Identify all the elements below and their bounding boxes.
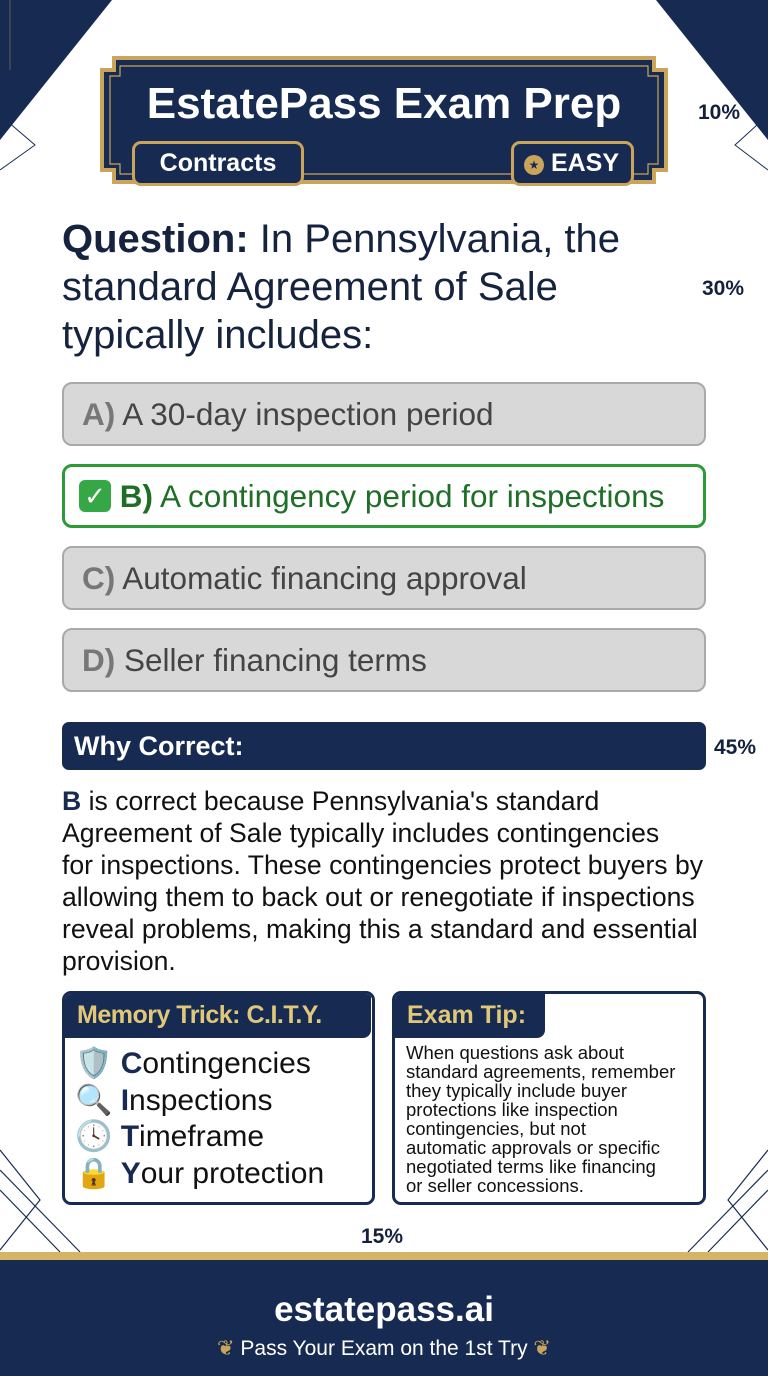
option B correct <box>62 464 706 528</box>
explanation text: provision. <box>62 946 176 976</box>
exam tip text: they typically include buyer <box>406 1080 627 1101</box>
option A <box>62 382 706 446</box>
exam tip text: automatic approvals or specific <box>406 1137 660 1158</box>
memory trick heading <box>65 994 371 1038</box>
exam tip text: When questions ask about <box>406 1042 624 1063</box>
title text: EstatePass Exam Prep <box>147 79 621 128</box>
panel: exam tip <box>392 991 706 1205</box>
memory trick heading: Memory Trick: C.I.T.Y. <box>77 1001 322 1029</box>
mnemonic list: 🔒 Your protection <box>75 1156 324 1190</box>
pill: EASY: ★ <box>529 158 539 172</box>
mnemonic list: 🕓 Timeframe <box>75 1120 264 1153</box>
mnemonic list: 🔍 Inspections <box>75 1084 272 1116</box>
percent 45%: 45% <box>714 736 756 759</box>
panel: memory trick <box>62 991 375 1205</box>
exam tip heading: Exam Tip: <box>407 1001 526 1029</box>
explanation text: reveal problems, making this a standard and essential <box>62 914 698 944</box>
question: standard Agreement of Sale <box>62 265 558 309</box>
exam tip text: or seller concessions. <box>406 1175 584 1196</box>
footer tagline: ❦ Pass Your Exam on the 1st Try ❦ <box>217 1337 551 1360</box>
mnemonic list <box>75 1046 324 1190</box>
exam tip heading <box>395 994 545 1038</box>
exam tip text: contingencies, but not <box>406 1118 586 1139</box>
title banner <box>100 56 668 184</box>
option C: C) Automatic financing approval <box>82 560 527 596</box>
explanation text: Agreement of Sale typically includes contingencies <box>62 818 659 848</box>
exam tip text: negotiated terms like financing <box>406 1156 656 1177</box>
why correct header <box>62 722 706 770</box>
footer <box>0 1252 768 1376</box>
question <box>62 217 620 357</box>
footer brand: estatepass.ai <box>274 1290 494 1329</box>
option B correct: B) A contingency period for inspections <box>120 478 664 514</box>
exam tip text <box>406 1042 676 1196</box>
pill: Contracts <box>132 141 304 186</box>
pill: EASY: EASY <box>551 149 619 177</box>
percent 15%: 15% <box>361 1225 403 1248</box>
exam tip text: standard agreements, remember <box>406 1061 675 1082</box>
why correct header: Why Correct: <box>74 731 244 761</box>
mnemonic list: 🛡️ Contingencies <box>75 1047 311 1080</box>
option C <box>62 546 706 610</box>
percent 10%: 10% <box>698 101 740 124</box>
explanation text: B is correct because Pennsylvania's standard <box>62 786 599 816</box>
explanation text: for inspections. These contingencies protect buyers by <box>62 850 703 880</box>
pill: EASY <box>511 141 634 186</box>
explanation text <box>62 786 703 976</box>
option D <box>62 628 706 692</box>
question: Question: In Pennsylvania, the <box>62 217 620 261</box>
question: typically includes: <box>62 313 373 357</box>
exam tip text: protections like inspection <box>406 1099 618 1120</box>
option B correct: ✓ <box>84 481 106 511</box>
option A: A) A 30-day inspection period <box>82 396 494 432</box>
option D: D) Seller financing terms <box>82 642 427 678</box>
explanation text: allowing them to back out or renegotiate if inspections <box>62 882 695 912</box>
percent 30%: 30% <box>702 277 744 300</box>
pill: Contracts: Contracts <box>160 149 276 177</box>
